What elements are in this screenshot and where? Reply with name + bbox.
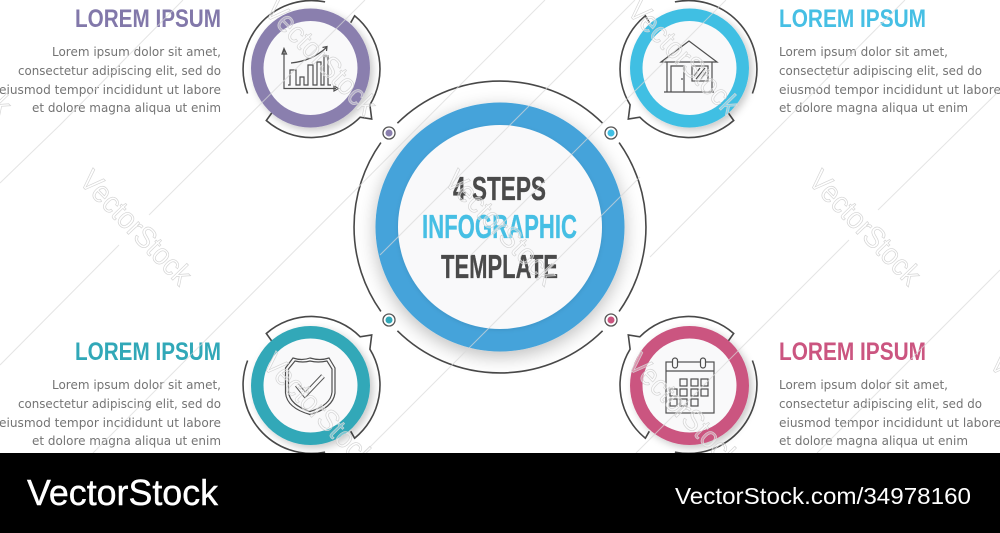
inner disc [642,338,736,432]
body text: Lorem ipsum dolor sit amet, [779,377,948,392]
panel: step 4 pink [620,316,1000,453]
footer logo text: VectorStock [27,472,219,513]
icon: house [661,41,717,92]
inner disc [398,125,602,329]
watermark overlay: VectorStock [73,164,199,293]
center title [422,170,577,285]
body text: consectetur adipiscing elit, sed do [18,396,221,411]
watermark overlay: VectorStock [802,164,928,293]
body text: et dolore magna aliqua ut enim [779,433,968,448]
body text: consectetur adipiscing elit, sed do [779,396,982,411]
panel: step 2 cyan [620,1,1000,138]
body text: Lorem ipsum dolor sit amet, [52,44,221,59]
body text: et dolore magna aliqua ut enim [779,100,968,115]
connector dot: pink [605,314,617,326]
outer segmented ring [354,81,646,373]
body text: et dolore magna aliqua ut enim [32,100,221,115]
callout outline [243,1,380,138]
body text: eiusmod tempor incididunt ut labore [0,415,221,430]
body text: Lorem ipsum dolor sit amet, [52,377,221,392]
panel: step 1 purple [0,1,380,138]
footer bar [0,453,1000,533]
body text [0,377,221,448]
inner disc [264,338,358,432]
cyan ring [630,8,749,128]
icon: calendar [666,358,714,413]
connector dot: cyan [605,127,617,139]
callout outline [620,316,757,453]
blue ring [376,102,624,352]
heading: LOREM IPSUM [779,5,926,33]
body text: Lorem ipsum dolor sit amet, [779,44,948,59]
purple ring [251,8,370,128]
center hub [354,81,646,373]
watermark overlay: VectorStock [621,347,747,476]
watermark overlay: VectorStock [256,347,382,476]
center title: TEMPLATE [441,248,558,285]
inner disc [642,21,736,115]
icon: growth chart [282,46,338,91]
body text [779,44,1000,115]
callout outline [243,316,380,453]
heading: LOREM IPSUM [75,5,221,33]
panel: step 3 teal [0,316,380,453]
heading: LOREM IPSUM [75,338,221,366]
body text: eiusmod tempor incididunt ut labore [0,82,221,97]
heading: LOREM IPSUM [779,338,926,366]
body text: et dolore magna aliqua ut enim [32,433,221,448]
body text: consectetur adipiscing elit, sed do [779,63,982,78]
pink ring [630,326,749,445]
teal ring [251,326,370,445]
watermark overlay: VectorStock [438,164,564,293]
connector dot: purple [383,127,395,139]
inner disc [264,21,358,115]
body text [0,44,221,115]
body text [779,377,1000,448]
icon: shield with check [286,358,335,414]
center title: 4 STEPS [453,170,546,207]
callout outline [620,1,757,138]
center title: INFOGRAPHIC [422,208,577,245]
body text: consectetur adipiscing elit, sed do [18,63,221,78]
connector dot: teal [383,314,395,326]
footer image id: VectorStock.com/34978160 [675,483,971,509]
